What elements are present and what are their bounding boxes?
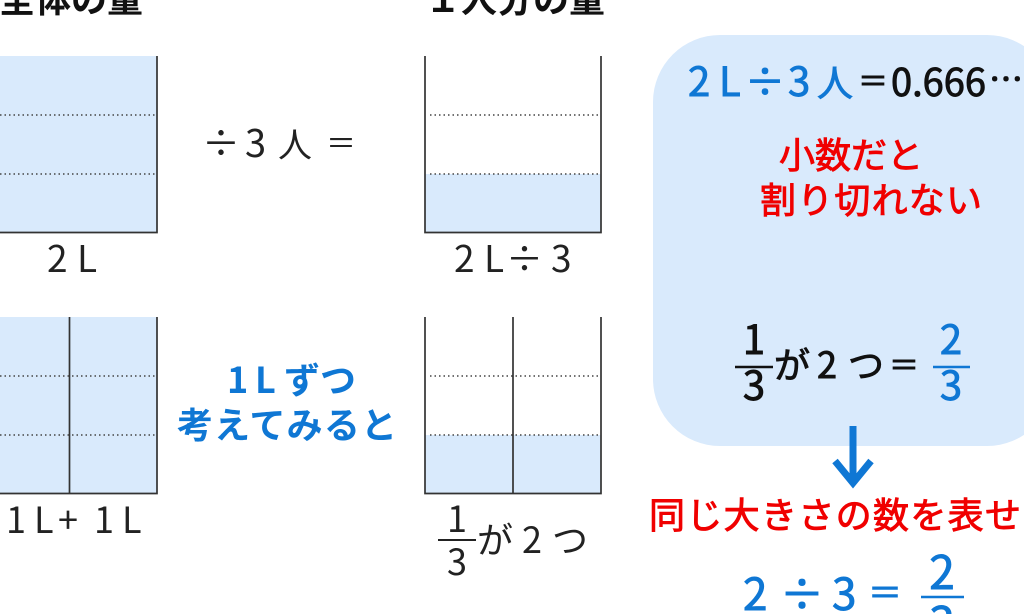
equation: 2 / 3 = 2/3: ＝ xyxy=(868,566,902,614)
equation: 2L / 3 people = 0.666: 0.666 xyxy=(891,52,986,107)
beaker: per person xyxy=(425,56,601,232)
equation: 2L / 3 people = 0.666: … xyxy=(989,53,1023,102)
equation: one third times two equals two thirds xyxy=(735,308,970,412)
label: 2L divided by 3: 2L÷3 xyxy=(454,229,572,283)
operator: divide by 3 people: ＝ xyxy=(326,119,356,163)
message: cannot be divided as decimals: 小数だと xyxy=(779,127,923,179)
label: one third times two: が2つ xyxy=(477,512,588,564)
beaker: total split into 1L + 1L xyxy=(0,317,157,494)
callout: thinking in 1L units: 1Lずつ xyxy=(227,352,356,404)
equation: 2L / 3 people = 0.666: ＝ xyxy=(858,57,888,101)
equation: one third times two equals two thirds: ＝ xyxy=(889,341,919,385)
equation: one third times two equals two thirds: が2つ xyxy=(774,337,884,389)
callout: thinking in 1L units xyxy=(177,352,397,449)
message: can represent same-size number: 同じ大きさの数を表せ xyxy=(649,487,1021,539)
label: one third times two xyxy=(438,491,588,586)
panel: explanation xyxy=(653,35,1024,446)
label: one third times two: 3 xyxy=(447,534,467,586)
label: one third times two: 1 xyxy=(447,491,467,543)
equation: one third times two equals two thirds: 2 xyxy=(940,308,962,366)
operator: divide by 3 people: 人 xyxy=(278,118,312,167)
equation: 2L / 3 people = 0.666: 2L÷3 xyxy=(688,50,810,108)
equation: 2L / 3 people = 0.666: 人 xyxy=(817,55,853,107)
equation: 2 / 3 = 2/3: 2 xyxy=(929,537,955,603)
callout: thinking in 1L units: 考えてみると xyxy=(177,397,397,449)
equation: one third times two equals two thirds: 3 xyxy=(940,354,962,412)
equation: 2 / 3 = 2/3 xyxy=(743,537,964,614)
arrow: down xyxy=(835,426,871,483)
operator: divide by 3 people: ÷3 xyxy=(202,113,266,168)
equation: 2L / 3 people = 0.666 xyxy=(688,50,1023,108)
label: 2L: 2L xyxy=(47,229,97,283)
message: cannot be divided as decimals: 割り切れない xyxy=(760,172,982,224)
beaker: per person split xyxy=(425,317,601,494)
equation: one third times two equals two thirds: 1 xyxy=(743,308,765,366)
label: 1L + 1L: 1L+1L xyxy=(6,492,142,544)
operator: divide by 3 people xyxy=(202,113,356,168)
equation: one third times two equals two thirds: 3 xyxy=(743,354,765,412)
message: cannot be divided as decimals xyxy=(760,127,982,224)
beaker: total 2L xyxy=(0,56,157,232)
